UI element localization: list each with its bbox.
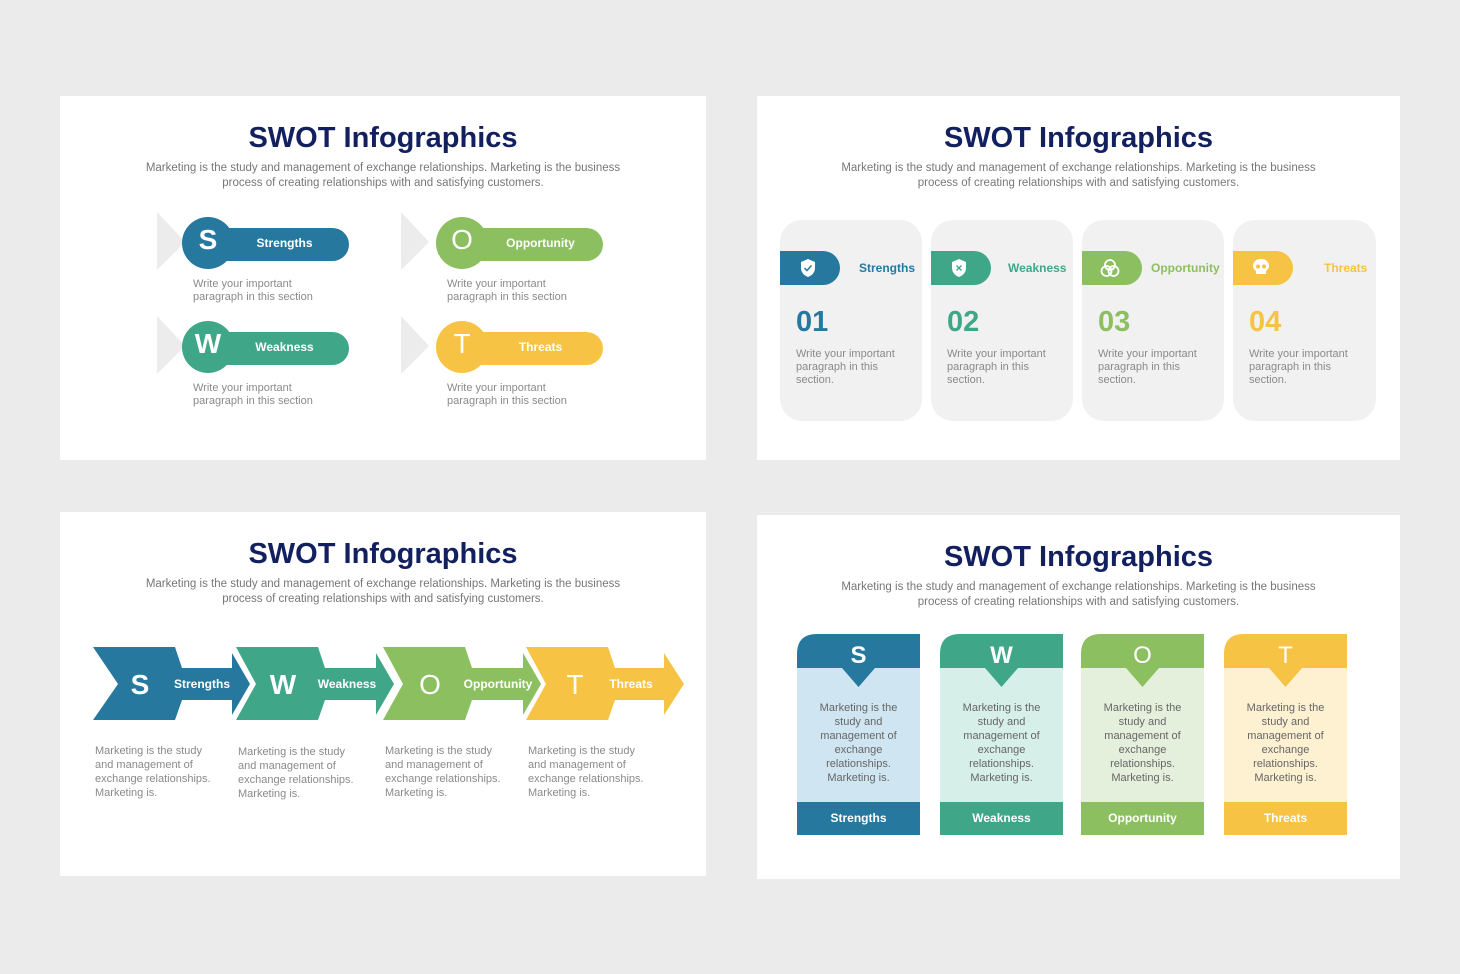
text: opportunity <box>385 745 501 799</box>
column: weakness: study and <box>978 716 1025 728</box>
item: threats <box>401 316 603 407</box>
subtitle: process of creating relationships with and satisfying customers. <box>222 177 544 189</box>
panel: top-right SWOT cards <box>757 96 1400 460</box>
text: threats <box>528 745 644 799</box>
item: weakness: Weakness <box>255 340 314 354</box>
item: opportunity: paragraph in this section <box>447 291 567 303</box>
column: weakness: Weakness <box>972 811 1031 825</box>
text: strengths: Marketing is. <box>95 787 157 799</box>
card: weakness: Weakness <box>1008 261 1066 275</box>
subtitle: Marketing is the study and management of exchange relationships. Marketing is the business <box>146 578 620 590</box>
card: threats: Write your important <box>1249 348 1348 360</box>
column: threats: exchange <box>1262 744 1309 756</box>
card: weakness: Write your important <box>947 348 1046 360</box>
card: opportunity <box>1082 220 1224 421</box>
column: strengths: management of <box>820 730 897 742</box>
panel: bottom-left SWOT arrows <box>60 512 706 876</box>
column: strengths <box>797 634 920 835</box>
title: SWOT Infographics <box>944 122 1213 154</box>
text: strengths: exchange relationships. <box>95 773 211 785</box>
column: weakness: W <box>990 642 1013 669</box>
card: strengths: Write your important <box>796 348 895 360</box>
card: weakness: paragraph in this <box>947 361 1029 373</box>
column: weakness <box>940 634 1063 835</box>
column: threats: management of <box>1247 730 1324 742</box>
arrow: weakness <box>236 647 394 720</box>
column: strengths: Marketing is the <box>820 702 897 714</box>
column: threats: study and <box>1262 716 1309 728</box>
text: threats: Marketing is the study <box>528 745 635 757</box>
item: threats: paragraph in this section <box>447 395 567 407</box>
arrow: strengths: S <box>131 669 149 700</box>
subtitle: process of creating relationships with and satisfying customers. <box>918 596 1239 608</box>
text: strengths: Marketing is the study <box>95 745 202 757</box>
column: strengths: S <box>850 642 866 669</box>
card: strengths: Strengths <box>859 261 915 275</box>
text: opportunity: Marketing is. <box>385 787 447 799</box>
column: weakness: Marketing is. <box>970 772 1033 784</box>
column: opportunity: Opportunity <box>1108 811 1177 825</box>
item: opportunity: Opportunity <box>506 236 575 250</box>
item: weakness: W <box>195 328 221 359</box>
item: weakness: paragraph in this section <box>193 395 313 407</box>
column: weakness: management of <box>963 730 1040 742</box>
card: opportunity: 03 <box>1098 306 1130 338</box>
item: strengths: Write your important <box>193 278 292 290</box>
column: weakness: exchange <box>978 744 1025 756</box>
arrow: strengths <box>93 647 250 720</box>
card: opportunity: Write your important <box>1098 348 1197 360</box>
item: threats: T <box>453 328 471 359</box>
subtitle <box>146 578 620 605</box>
card: opportunity: Opportunity <box>1151 261 1220 275</box>
title: SWOT Infographics <box>944 541 1213 573</box>
item: opportunity: O <box>451 224 473 255</box>
arrow: opportunity <box>383 647 541 720</box>
column: opportunity: management of <box>1104 730 1181 742</box>
column: opportunity: relationships. <box>1110 758 1175 770</box>
text: opportunity: exchange relationships. <box>385 773 501 785</box>
card: threats <box>1233 220 1376 421</box>
item: strengths <box>157 212 349 303</box>
column: weakness: Marketing is the <box>963 702 1040 714</box>
text: weakness: Marketing is the study <box>238 746 345 758</box>
column: threats: Marketing is. <box>1254 772 1317 784</box>
subtitle <box>841 581 1316 608</box>
arrow: threats: T <box>566 669 584 700</box>
item: strengths: S <box>199 224 217 255</box>
column: opportunity: study and <box>1119 716 1166 728</box>
card: threats: paragraph in this <box>1249 361 1331 373</box>
subtitle <box>146 162 620 189</box>
card: threats: Threats <box>1324 261 1367 275</box>
column: threats: Marketing is the <box>1247 702 1324 714</box>
panel: bottom-right SWOT columns <box>757 515 1400 879</box>
text: strengths <box>95 745 211 799</box>
text: threats: Marketing is. <box>528 787 590 799</box>
title: SWOT Infographics <box>248 122 518 154</box>
item: threats: Write your important <box>447 382 546 394</box>
text: opportunity: and management of <box>385 759 483 771</box>
text: weakness: exchange relationships. <box>238 774 354 786</box>
column: strengths: relationships. <box>826 758 891 770</box>
card: opportunity: paragraph in this <box>1098 361 1180 373</box>
card: threats: 04 <box>1249 306 1281 338</box>
text: weakness: Marketing is. <box>238 788 300 800</box>
arrow: threats <box>526 647 684 720</box>
subtitle: process of creating relationships with and satisfying customers. <box>918 177 1239 189</box>
arrow: strengths: Strengths <box>174 677 230 691</box>
arrow: threats: Threats <box>609 677 653 691</box>
card: weakness: 02 <box>947 306 979 338</box>
column: strengths: exchange <box>835 744 882 756</box>
text: strengths: and management of <box>95 759 193 771</box>
item: weakness: Write your important <box>193 382 292 394</box>
subtitle <box>841 162 1316 189</box>
column: strengths: Strengths <box>830 811 886 825</box>
subtitle: process of creating relationships with and satisfying customers. <box>222 593 544 605</box>
card: weakness: section. <box>947 374 985 386</box>
card: weakness <box>931 220 1073 421</box>
item: opportunity: Write your important <box>447 278 546 290</box>
column: threats: Threats <box>1264 811 1307 825</box>
card: strengths: section. <box>796 374 834 386</box>
text: threats: exchange relationships. <box>528 773 644 785</box>
column: opportunity: exchange <box>1119 744 1166 756</box>
card: strengths: paragraph in this <box>796 361 878 373</box>
column: opportunity: Marketing is the <box>1104 702 1181 714</box>
arrow: opportunity: Opportunity <box>464 677 533 691</box>
text: weakness: and management of <box>238 760 336 772</box>
item: opportunity <box>401 212 603 303</box>
card: strengths: 01 <box>796 306 828 338</box>
column: threats: T <box>1278 642 1293 669</box>
subtitle: Marketing is the study and management of exchange relationships. Marketing is the business <box>146 162 620 174</box>
column: threats: relationships. <box>1253 758 1318 770</box>
title: SWOT Infographics <box>248 538 518 570</box>
item: strengths: Strengths <box>256 236 312 250</box>
column: strengths: study and <box>835 716 882 728</box>
column: threats <box>1224 634 1347 835</box>
column: opportunity: Marketing is. <box>1111 772 1174 784</box>
column: weakness: relationships. <box>969 758 1034 770</box>
column: strengths: Marketing is. <box>827 772 890 784</box>
column: opportunity: O <box>1133 642 1152 669</box>
panel: top-left SWOT pills <box>60 96 706 460</box>
arrow: weakness: Weakness <box>318 677 377 691</box>
text: opportunity: Marketing is the study <box>385 745 492 757</box>
arrow chain <box>93 647 684 720</box>
column: opportunity <box>1081 634 1204 835</box>
item: strengths: paragraph in this section <box>193 291 313 303</box>
card: threats: section. <box>1249 374 1287 386</box>
text: weakness <box>238 746 354 800</box>
arrow: weakness: W <box>270 669 297 700</box>
subtitle: Marketing is the study and management of exchange relationships. Marketing is the business <box>841 581 1316 593</box>
card: opportunity: section. <box>1098 374 1136 386</box>
card: strengths <box>780 220 922 421</box>
subtitle: Marketing is the study and management of exchange relationships. Marketing is the business <box>841 162 1316 174</box>
item: threats: Threats <box>519 340 562 354</box>
arrow: opportunity: O <box>419 669 441 700</box>
text: threats: and management of <box>528 759 626 771</box>
item: weakness <box>157 316 349 407</box>
